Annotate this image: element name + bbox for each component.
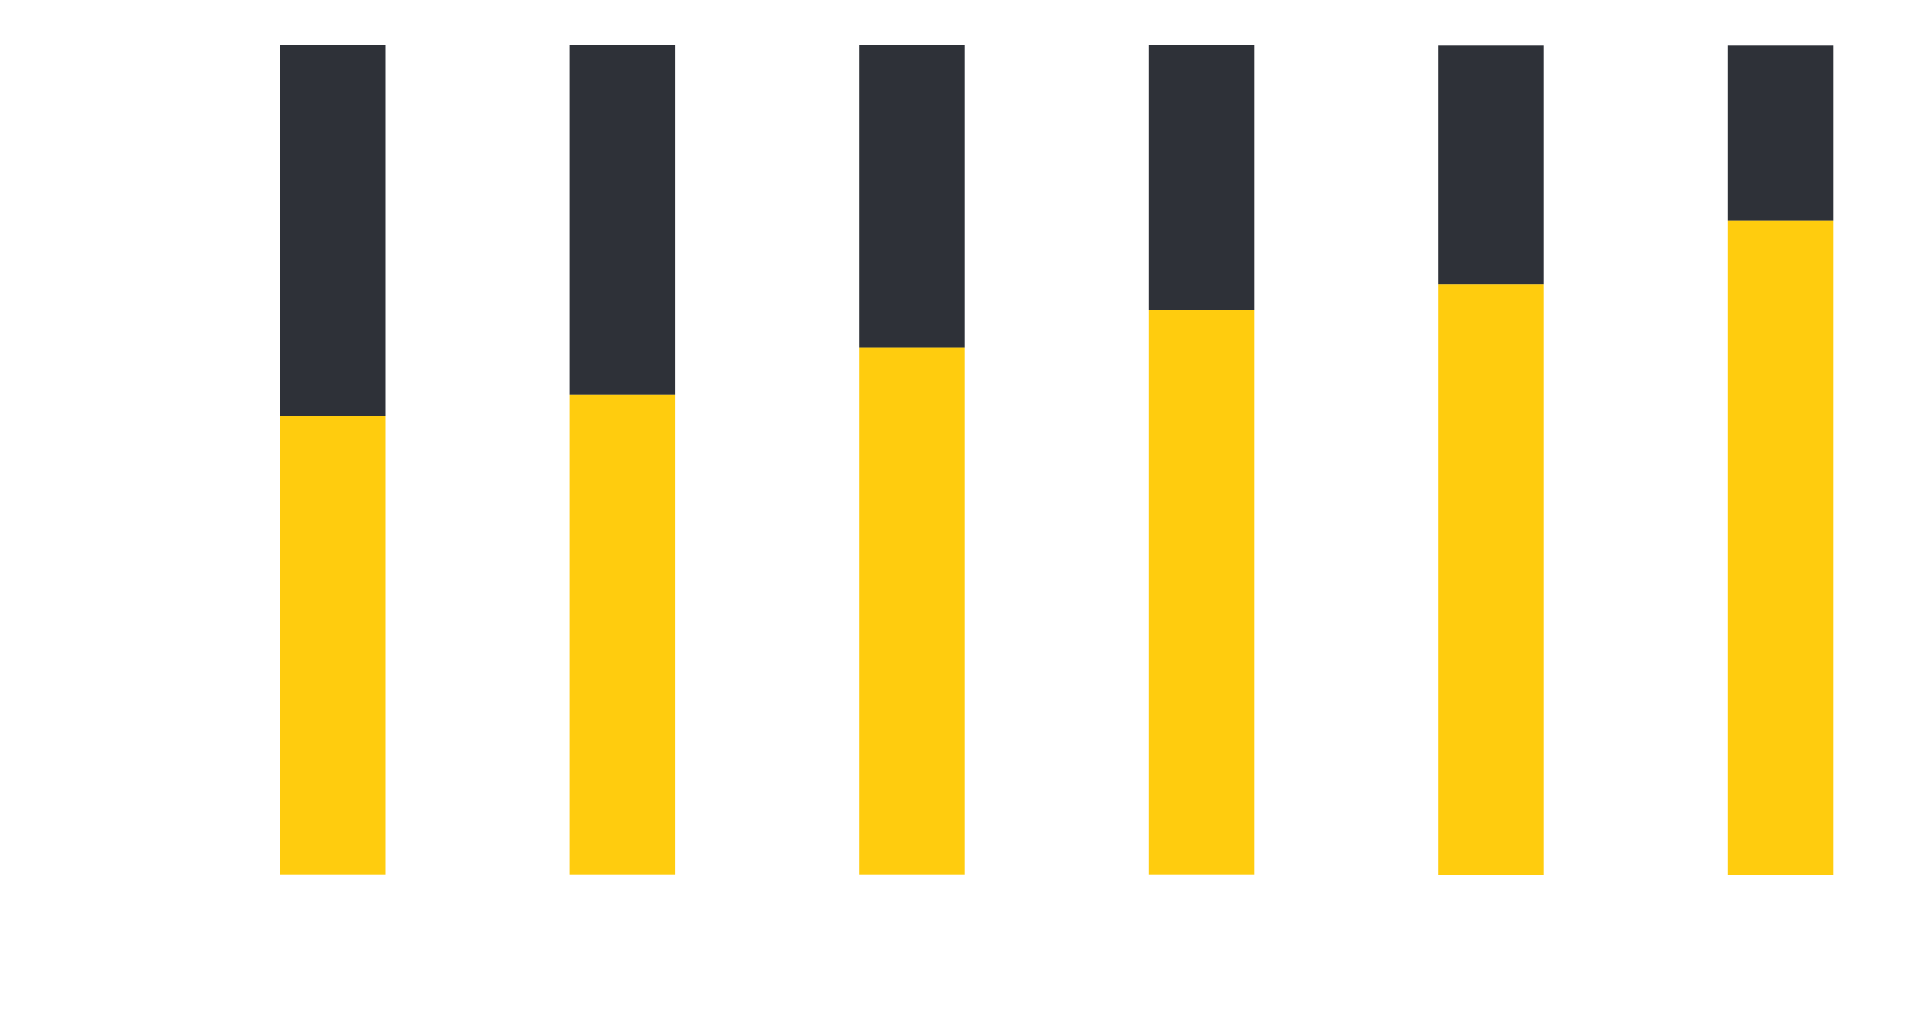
- bar 2: [570, 45, 675, 875]
- bar 4: [1149, 45, 1254, 875]
- bar 5: [1438, 45, 1544, 875]
- bar 3: [859, 45, 965, 875]
- bar 6: [1728, 45, 1833, 875]
- bar 1: [280, 45, 386, 875]
